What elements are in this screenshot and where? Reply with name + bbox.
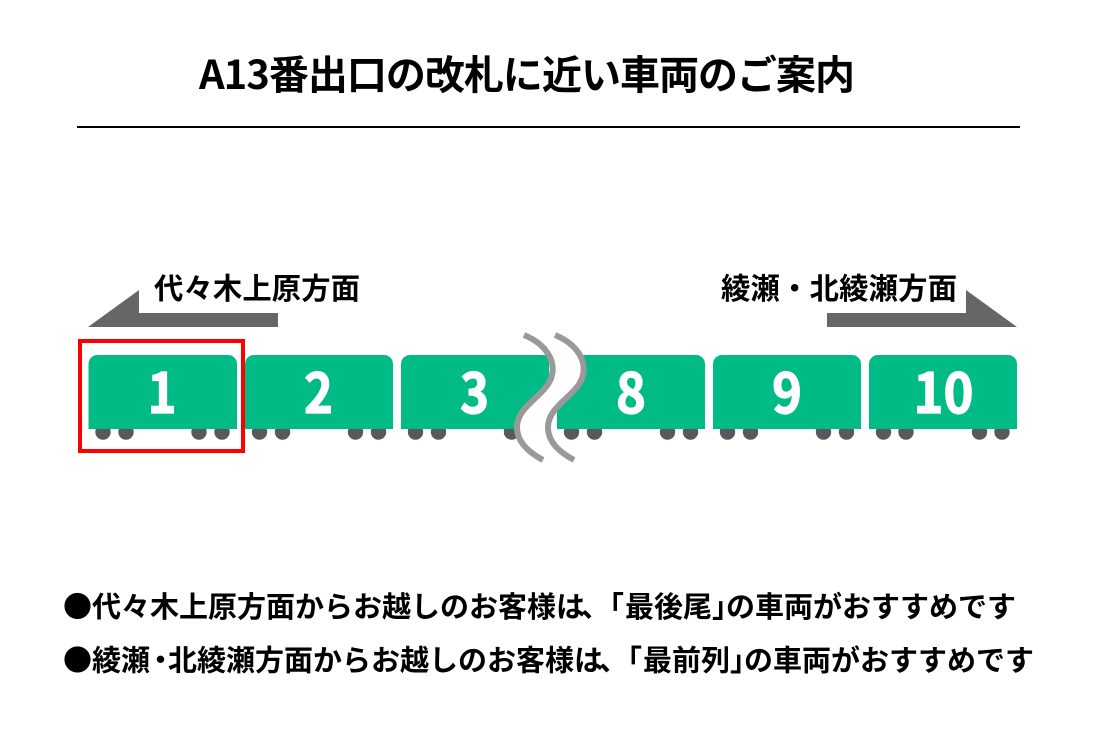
car 2: 2 [304, 349, 333, 429]
train [88, 349, 1017, 440]
car 1: 1 [148, 349, 176, 429]
note: Yoyogi-Uehara direction: の車両がおすすめです [726, 584, 1016, 626]
title: A13番出口の改札に近い車両のご案内 [198, 43, 855, 101]
note: Yoyogi-Uehara direction: 」 [712, 584, 741, 626]
car 10 [869, 349, 1017, 440]
note: Ayase direction: 最前列 [643, 638, 730, 680]
direction label: Ayase [721, 266, 1017, 327]
note: Yoyogi-Uehara direction: 最後尾 [625, 584, 712, 626]
note: Ayase direction: ●綾瀬 [63, 638, 150, 680]
line break squiggle [517, 335, 584, 460]
note: Ayase direction: の車両がおすすめです [744, 638, 1034, 680]
note: Ayase direction: 北綾瀬方面からお越しのお客様は [168, 638, 603, 680]
note: Yoyogi-Uehara direction: ●代々木上原方面からお越しのお客様は [63, 584, 585, 626]
note: Ayase direction: 」 [730, 638, 759, 680]
note: Yoyogi-Uehara direction: 「 [595, 584, 624, 626]
note: Yoyogi-Uehara direction: 、 [581, 584, 610, 626]
note: Ayase direction: 、 [599, 638, 628, 680]
direction label: Yoyogi-Uehara [88, 266, 360, 327]
car 2 [245, 349, 393, 440]
car 3: 3 [460, 349, 489, 429]
car 9 [713, 349, 861, 440]
note: Ayase direction: ・ [146, 638, 175, 680]
car 8 [557, 349, 705, 440]
car 3 [401, 349, 549, 440]
highlight box: car 1 [80, 341, 243, 451]
car 8: 8 [616, 349, 646, 429]
label text: right direction: 綾瀬・北綾瀬方面 [721, 266, 957, 308]
car 10: 10 [914, 349, 974, 429]
arrow: left [88, 290, 278, 327]
car 9: 9 [772, 349, 802, 429]
car 1 [88, 349, 237, 440]
label text: left direction: 代々木上原方面 [154, 266, 360, 308]
note: Ayase direction: 「 [613, 638, 642, 680]
arrow: right [827, 290, 1017, 327]
